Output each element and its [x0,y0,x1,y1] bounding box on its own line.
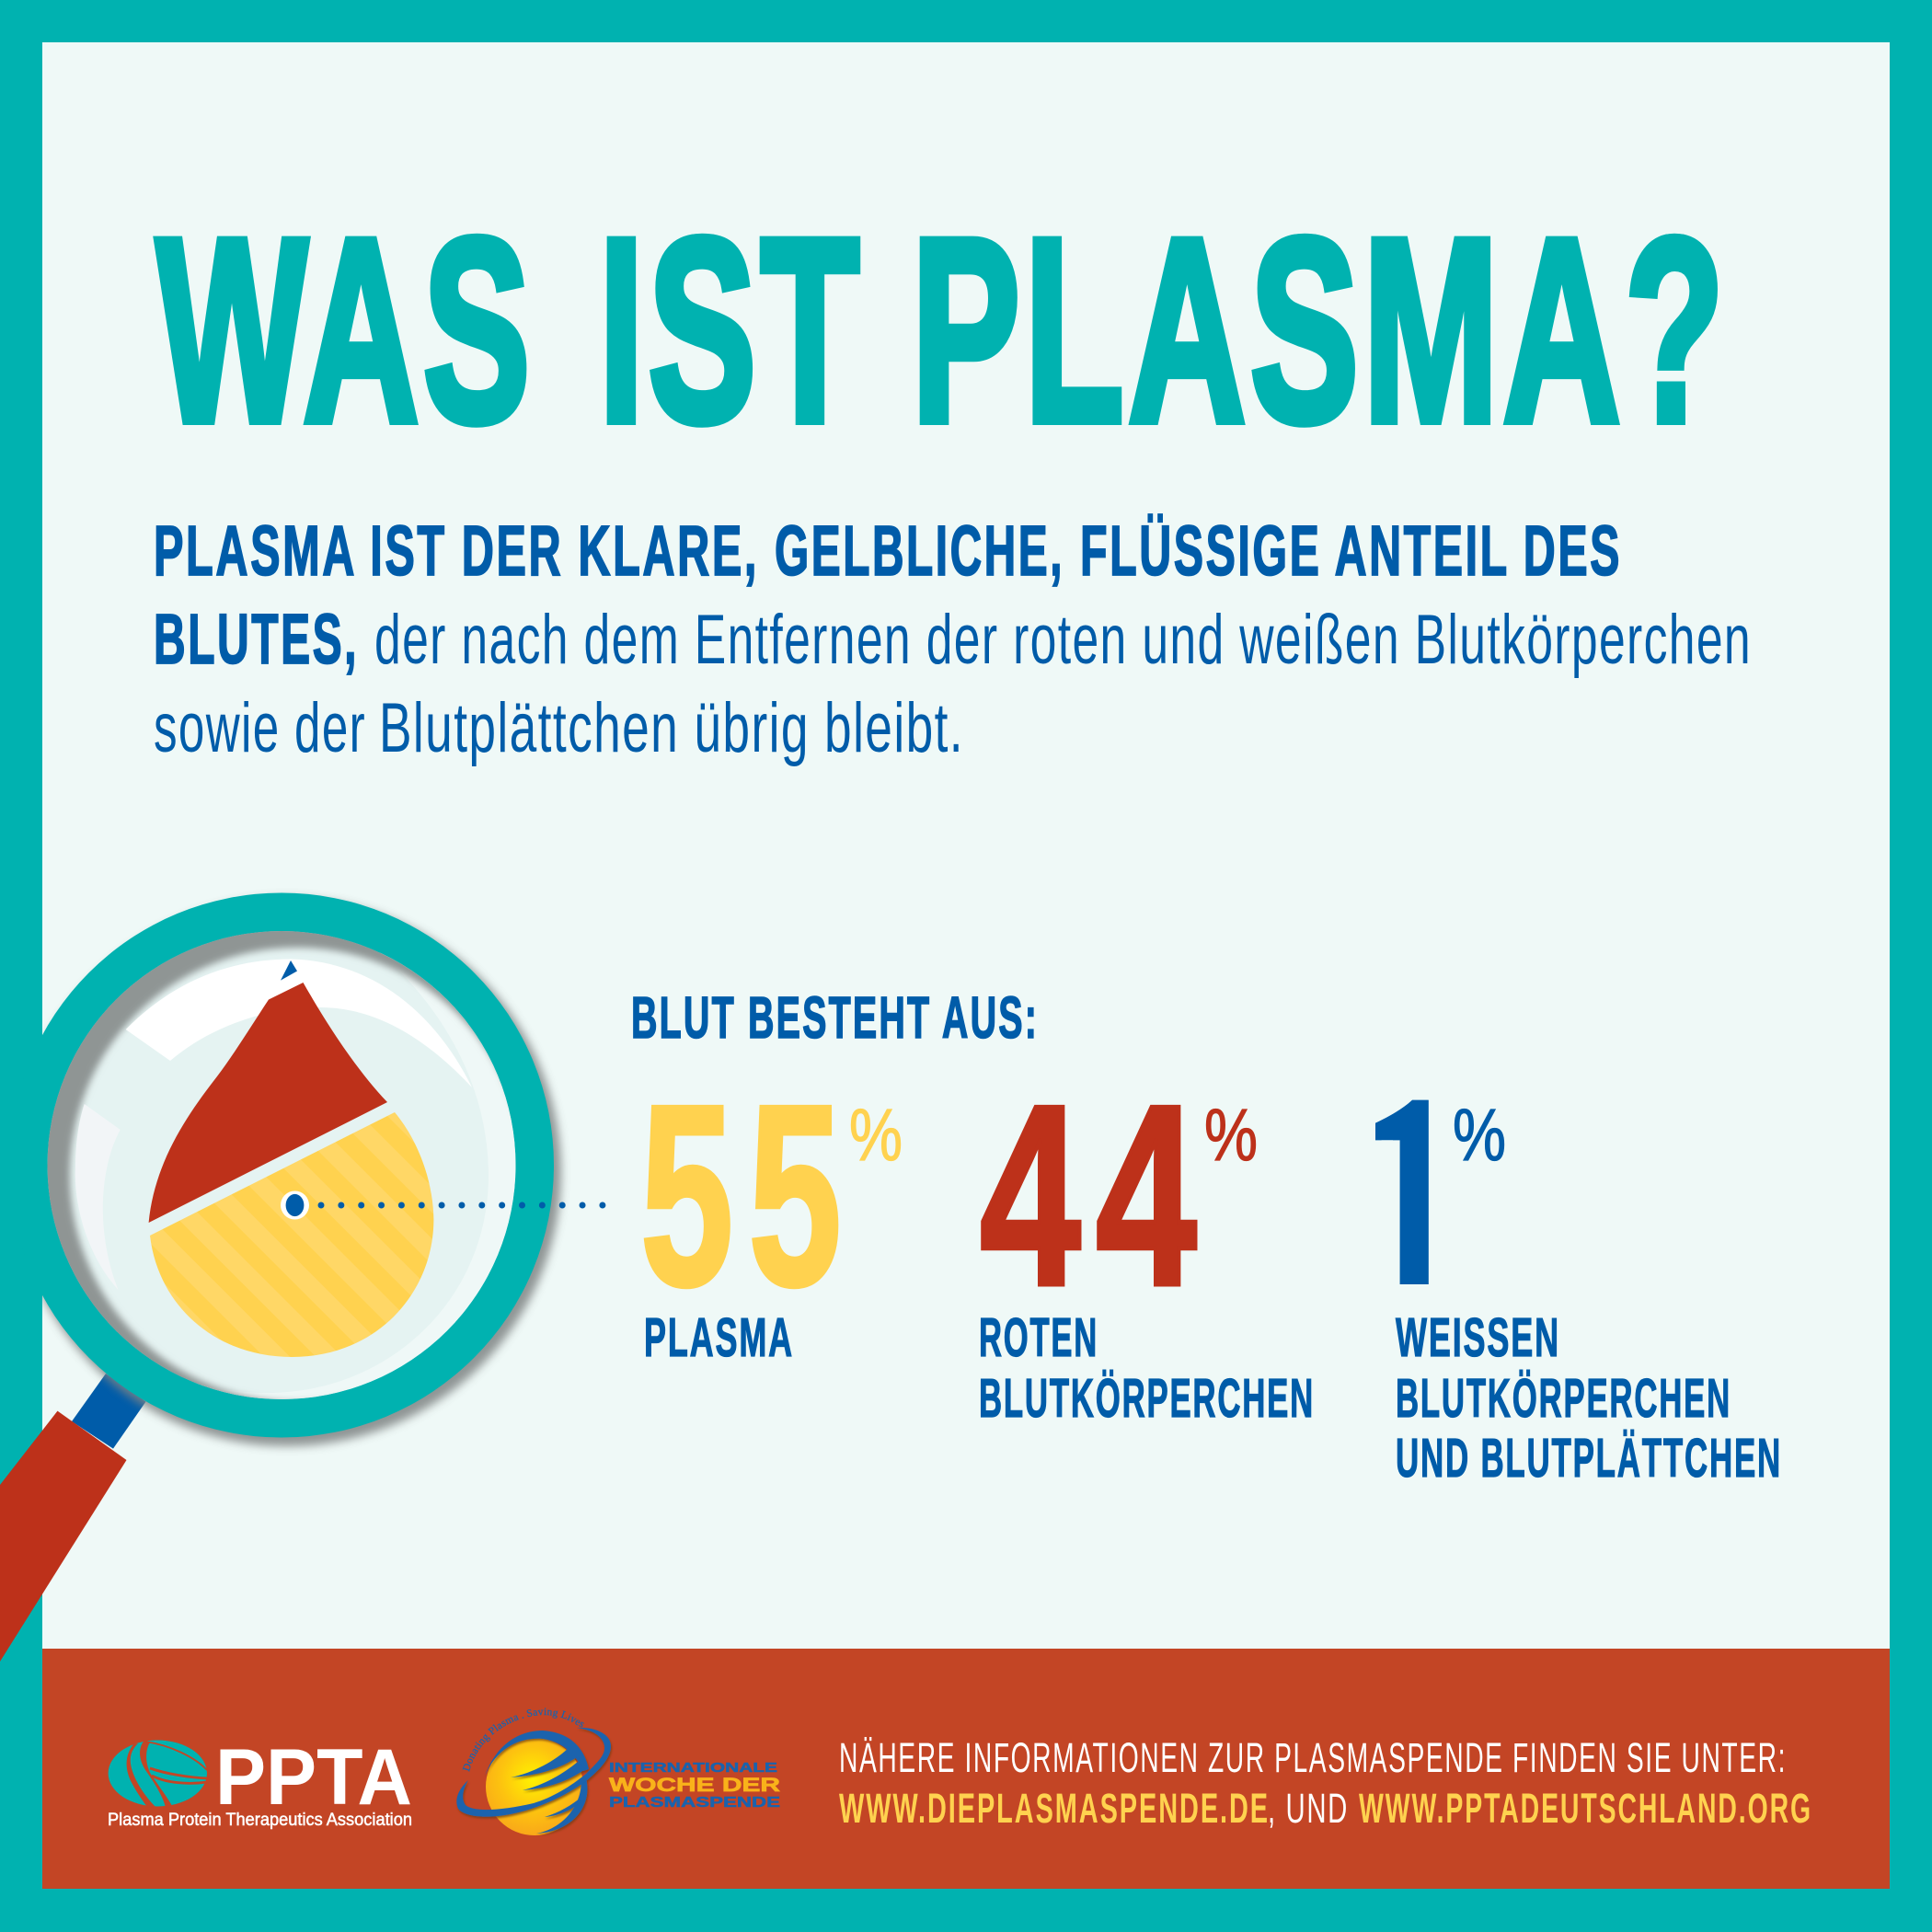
white highlight [126,959,472,1087]
label: BLUTKÖRPERCHEN [979,1368,1315,1429]
paragraph line 2 bold: BLUTES, [154,600,359,679]
label: ROTEN [979,1307,1098,1368]
paragraph line 1: PLASMA IST DER KLARE, [154,512,759,591]
red handle [0,1411,127,1662]
paragraph line 1: GELBLICHE, [775,512,1064,591]
lens rim crescent [193,952,515,1399]
number 55: 55 [640,1052,857,1340]
planet [486,1738,583,1835]
magnifying glass illustration [0,892,603,1662]
paragraph line 3: sowie der [154,689,366,767]
blood drop: tip [281,960,297,981]
plasma week logo: Donating Plasma . Saving Lives [462,1708,584,1772]
blood drop: plasma [150,1112,433,1357]
logo line 3: PLASMASPENDE [609,1795,780,1811]
number 44: 44 [980,1052,1212,1340]
title word IST: IST [599,185,864,477]
planet outline top [485,1731,589,1776]
label: PLASMA [644,1307,794,1368]
dotted leader line [321,1202,603,1209]
PPTA wordmark: PPTA [215,1733,412,1822]
intro paragraph [154,512,1752,767]
lens glass [48,931,515,1399]
marker dot [281,1190,309,1220]
link: dieplasmaspende: WWW.DIEPLASMASPENDE.DE [839,1785,1270,1832]
label [1396,1307,1782,1489]
paragraph line 3: Blutplättchen übrig bleibt. [379,689,964,767]
percent sign: % [1204,1094,1258,1176]
PPTA tagline: Plasma Protein Therapeutics Association [108,1811,412,1830]
swoosh 2 [523,1762,585,1790]
blood drop: red cells [149,983,387,1223]
percent sign: % [1453,1094,1506,1176]
footer band [42,1649,1890,1889]
curved slogan [469,1715,589,1772]
planet outline right [536,1776,587,1834]
logo line 2: WOCHE DER [609,1774,781,1796]
footer connector: , UND [1268,1785,1349,1832]
inner shadow [48,931,504,1399]
plasma week logo [456,1708,781,1836]
paragraph line 1 [154,512,1622,591]
PPTA logo [108,1733,412,1830]
percent sign: % [849,1094,903,1176]
light background panel [42,42,1890,1649]
swoosh 1 [511,1748,577,1777]
number 1: 1 [1322,1031,1491,1371]
footer call to action [839,1734,1812,1832]
paragraph line 3 [154,689,964,767]
pale left highlight [75,1104,121,1290]
magnifier ring [9,892,554,1437]
title [156,185,1729,477]
planet and orbit strokes [456,1728,611,1834]
stats heading: BLUT BESTEHT AUS: [631,984,1039,1051]
stat: 1 percent white cells and platelets [1375,1100,1779,1478]
stat: 55 percent plasma [640,1052,903,1368]
PPTA emblem [109,1741,207,1808]
label: WEISSEN [1396,1307,1560,1368]
label [979,1307,1315,1429]
swoosh 3 [545,1797,581,1817]
logo line 1: INTERNATIONALE [609,1761,777,1776]
ring drop shadow [13,898,561,1446]
title word WAS: WAS [156,185,535,477]
orbit ring [456,1728,611,1817]
stat: 44 percent red cells [979,1052,1315,1429]
handle connector [72,1374,145,1449]
paragraph line 1: FLÜSSIGE ANTEIL DES [1080,512,1622,591]
